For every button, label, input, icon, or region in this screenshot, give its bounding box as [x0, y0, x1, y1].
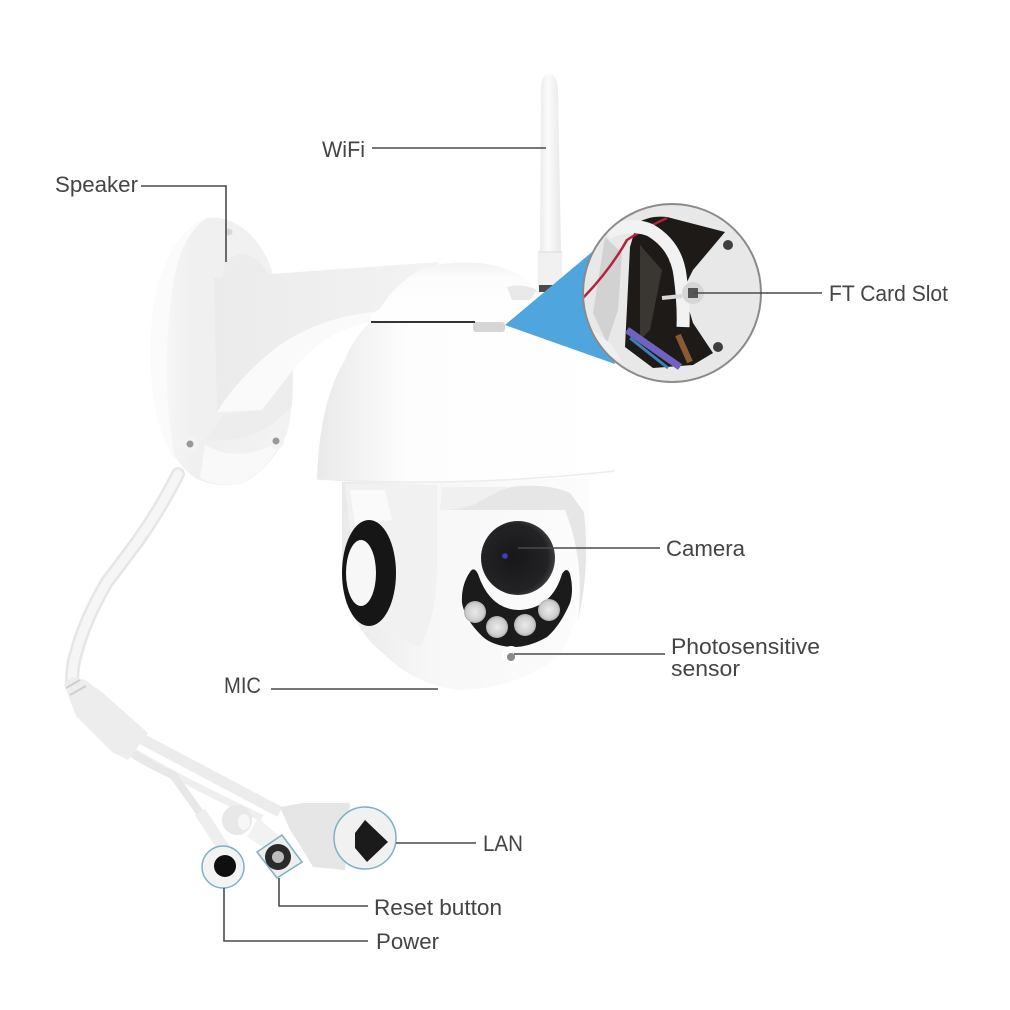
- lens: [481, 521, 555, 595]
- label: Reset button: Reset button: [374, 895, 502, 920]
- label: Camera: Camera: [666, 536, 746, 561]
- camera dome: [317, 262, 615, 483]
- label: Power: Power: [376, 929, 439, 954]
- label: LAN: LAN: [483, 831, 523, 856]
- side ring: [342, 520, 396, 626]
- power jack: [202, 846, 244, 888]
- wall mount bracket: [150, 218, 440, 485]
- camera lower ball housing: [342, 478, 590, 690]
- reset button: [257, 835, 302, 878]
- label: FT Card Slot: FT Card Slot: [829, 281, 948, 306]
- label: Photosensitive sensor: Photosensitive: [671, 634, 820, 659]
- label: Photosensitive sensor: sensor: [671, 656, 740, 681]
- antenna: [538, 74, 562, 292]
- leader lines: [141, 148, 822, 941]
- cable splitter and connectors: [64, 677, 396, 888]
- FT card slot zoom beam: [473, 252, 615, 364]
- LAN connector: [280, 803, 396, 870]
- IR LED crescent: [462, 569, 572, 647]
- label: MIC: MIC: [224, 673, 261, 698]
- FT card slot magnifier: [583, 204, 761, 382]
- label: WiFi: WiFi: [322, 137, 365, 162]
- photosensitive sensor: [502, 646, 520, 664]
- label: Speaker: Speaker: [55, 172, 138, 197]
- cable: [72, 474, 178, 682]
